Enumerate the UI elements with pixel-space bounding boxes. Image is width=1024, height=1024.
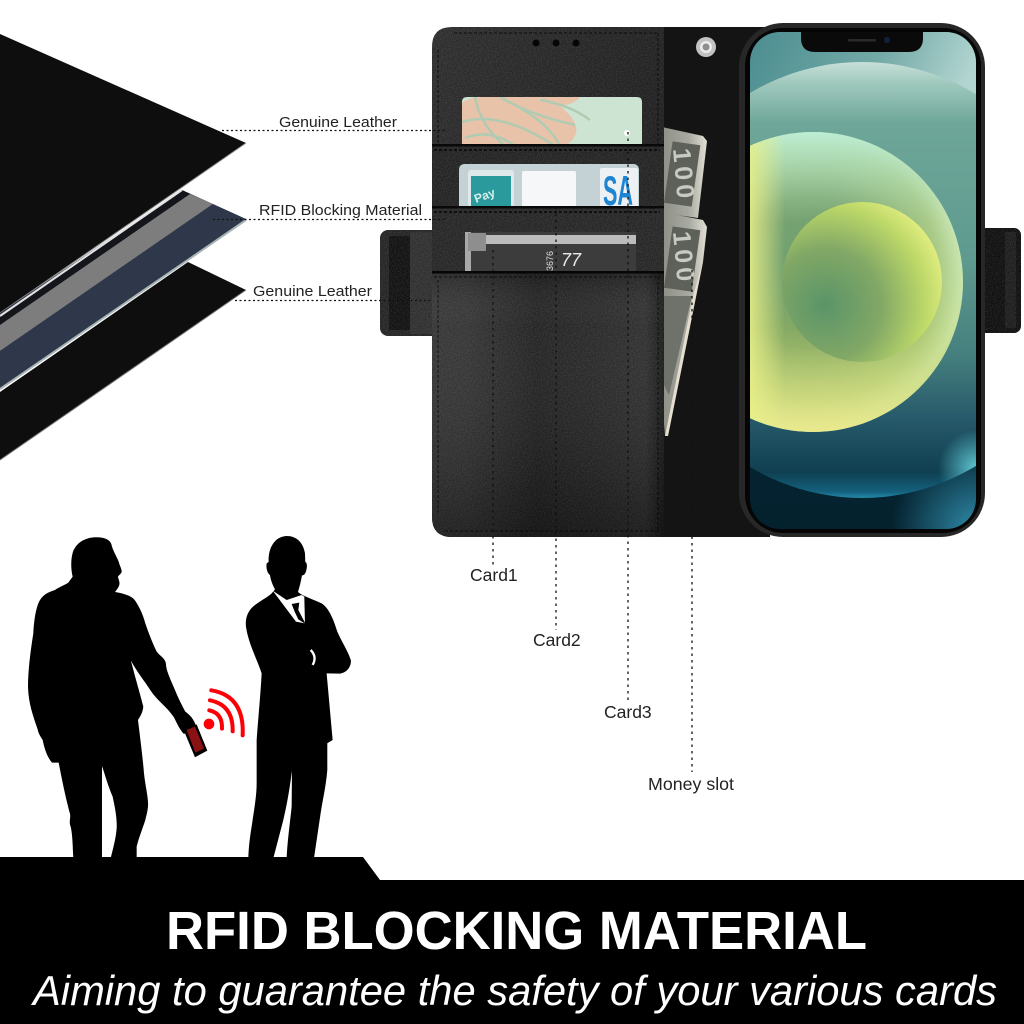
card slot 2 xyxy=(432,206,664,272)
label: card 1: Card1 xyxy=(470,565,518,585)
phone screen wallpaper xyxy=(750,32,976,529)
inner flap with grommet xyxy=(650,27,770,537)
thief and victim scene xyxy=(28,536,351,858)
money: dollar bills: 100 xyxy=(667,147,699,199)
label: card 2: Card2 xyxy=(533,630,581,650)
wallet front panel xyxy=(432,27,664,537)
phone case xyxy=(739,23,985,537)
layer: top genuine leather xyxy=(0,34,246,313)
card 3: 77 xyxy=(561,250,582,270)
silhouette: thief xyxy=(28,537,196,858)
label: money slot: Money slot xyxy=(648,774,734,794)
bottom banner xyxy=(0,857,1024,1024)
label: genuine leather bottom: Genuine Leather xyxy=(253,284,372,300)
card 1 xyxy=(462,97,642,147)
banner background xyxy=(0,857,1024,1024)
card 2: Pay xyxy=(472,185,497,206)
card 2 xyxy=(459,164,639,214)
wallet case xyxy=(380,27,1021,537)
icon: wireless signal xyxy=(204,690,243,735)
card slot 1 xyxy=(432,144,664,207)
phone bezel xyxy=(745,28,981,533)
layer: bottom genuine leather xyxy=(0,262,246,460)
layer: RFID blocking material xyxy=(0,190,246,389)
phone notch xyxy=(801,32,923,52)
card 3 xyxy=(465,232,636,272)
card 2: SA xyxy=(603,167,633,214)
silhouette: man in suit xyxy=(246,536,351,858)
icon: red card reader xyxy=(183,724,207,757)
money: dollar bills xyxy=(662,127,707,436)
money: dollar bills: 100 xyxy=(667,230,699,282)
clasp: left strap xyxy=(380,230,440,336)
phone xyxy=(739,23,985,537)
label: genuine leather top: Genuine Leather xyxy=(279,115,397,131)
label: card 3: Card3 xyxy=(604,702,652,722)
heading: RFID BLOCKING MATERIAL xyxy=(166,901,867,961)
dotted leader lines xyxy=(213,130,692,772)
layered material diagram xyxy=(0,34,246,460)
clasp: right strap xyxy=(975,228,1021,333)
front pocket xyxy=(432,271,664,537)
subheading: Aiming to guarantee the safety of your various cards xyxy=(30,967,997,1014)
card 3: 3676 xyxy=(545,251,555,271)
label: RFID blocking material: RFID Blocking Material xyxy=(259,203,422,219)
